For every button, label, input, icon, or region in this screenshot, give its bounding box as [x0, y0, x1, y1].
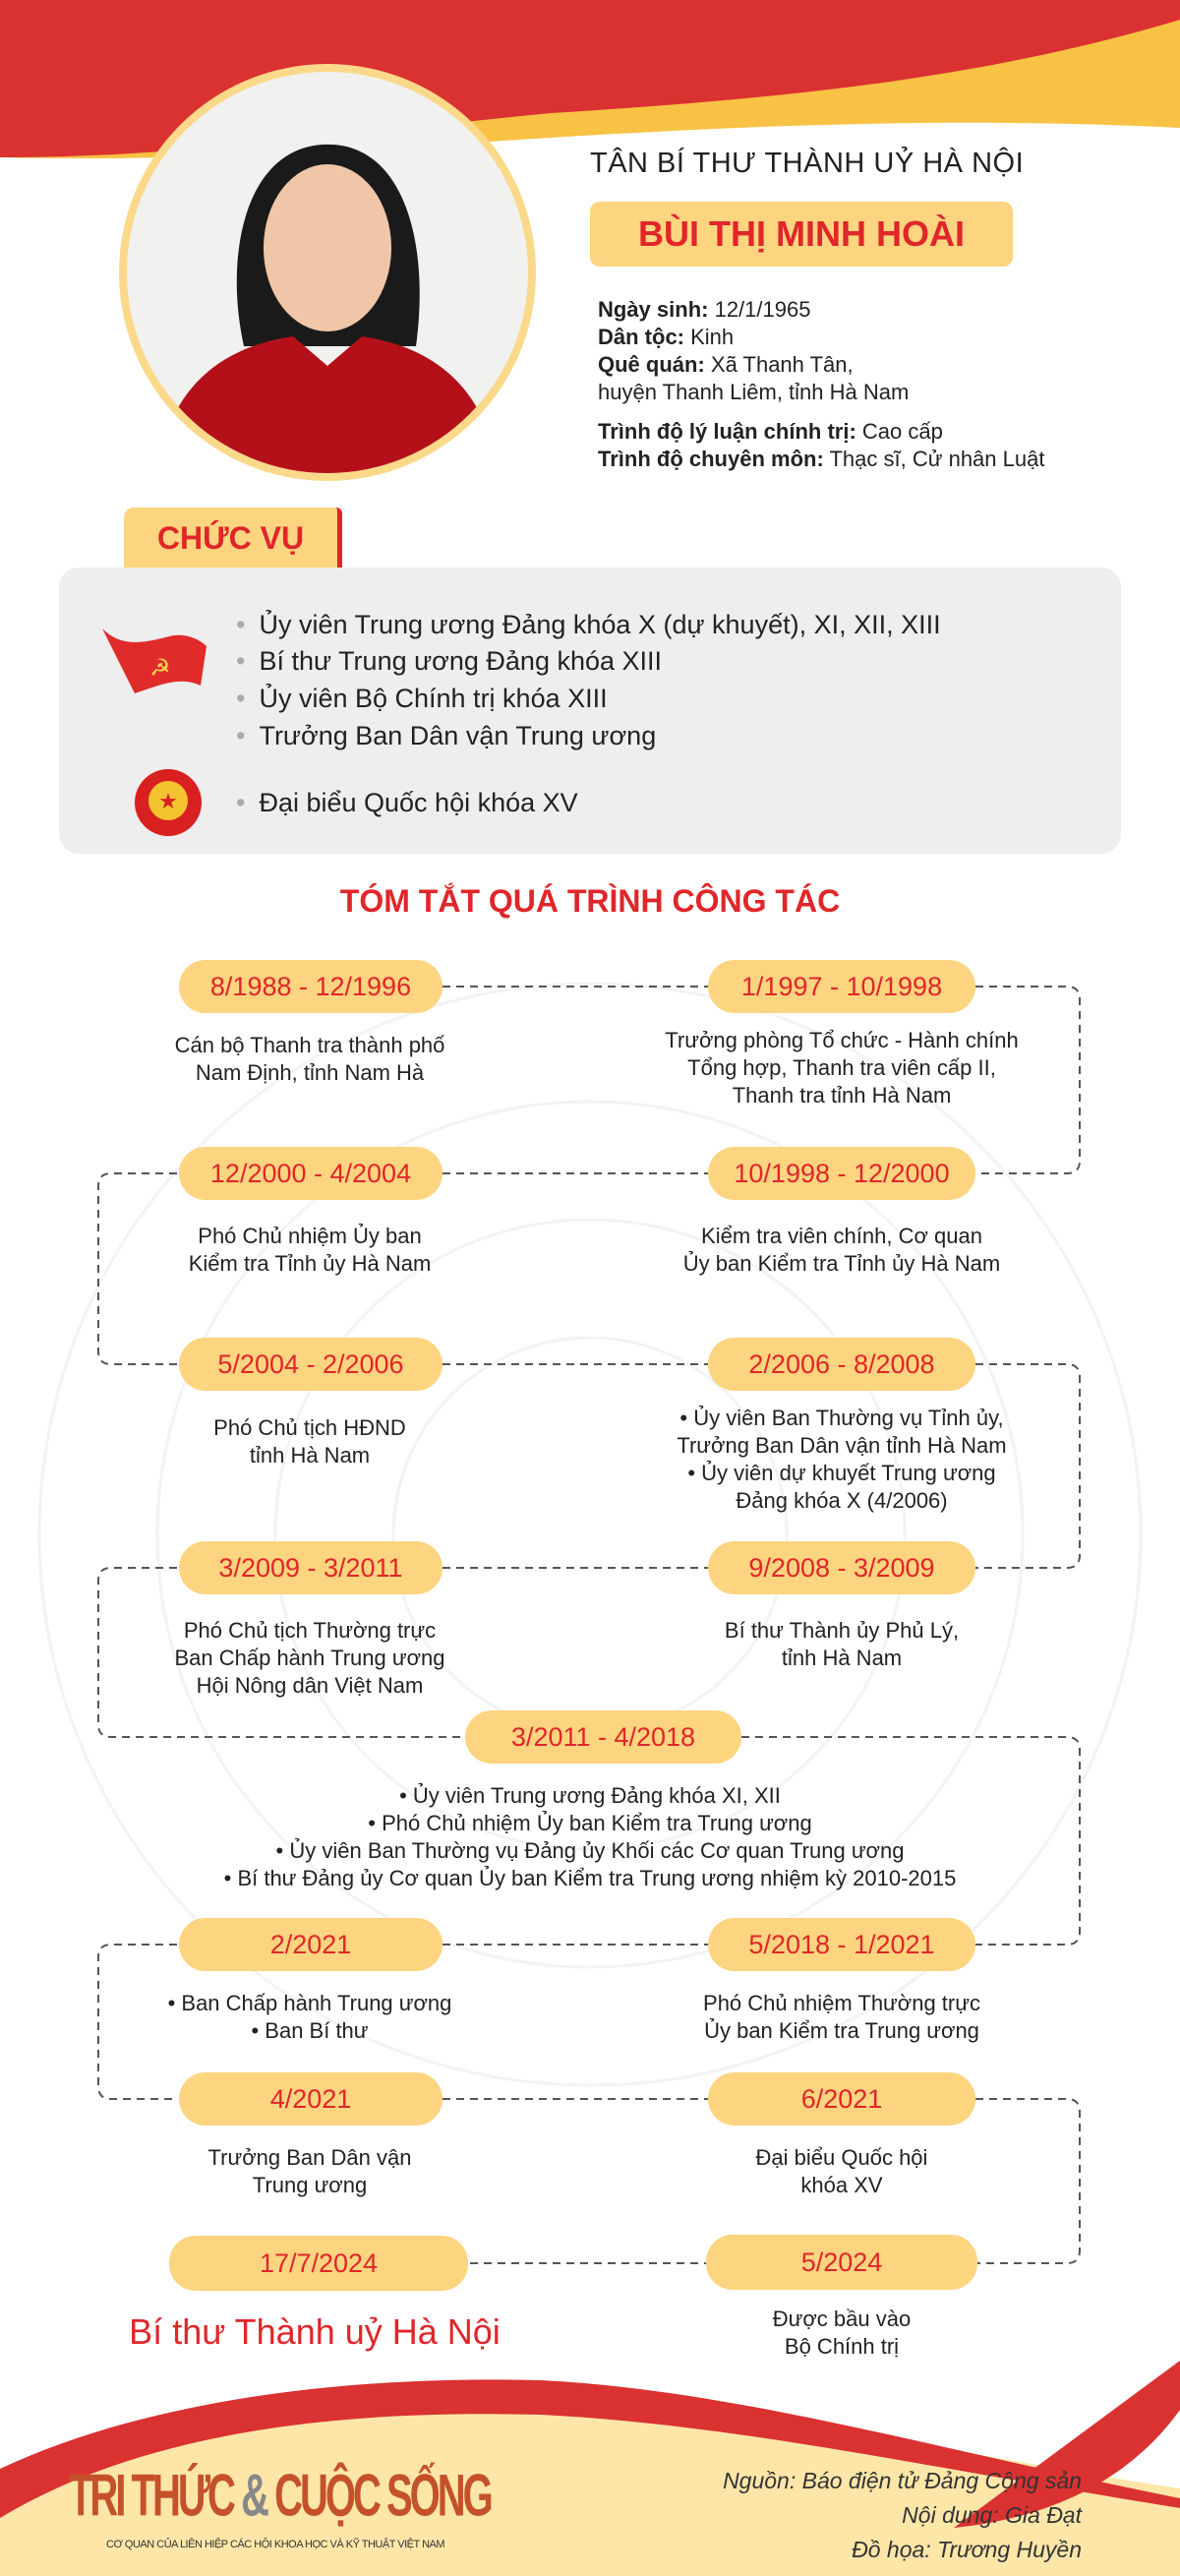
header title: TÂN BÍ THƯ THÀNH UỶ HÀ NỘI	[590, 148, 1024, 179]
bullet list: Ủy viên Bộ Chính trị khóa XIII	[259, 684, 608, 713]
text: khóa XV	[800, 2173, 883, 2197]
row 8	[169, 2236, 468, 2291]
text: Ủy ban Kiểm tra Trung ương	[704, 2018, 979, 2043]
text: Phó Chủ tịch HĐND	[213, 1415, 406, 1440]
text: Bí thư Thành uỷ Hà Nội	[129, 2311, 501, 2352]
row 7	[179, 2072, 442, 2126]
row 3	[179, 1338, 442, 1391]
chuc vu tab	[124, 508, 342, 569]
text: • Ban Chấp hành Trung ương	[168, 1991, 451, 2015]
text: Thanh tra tỉnh Hà Nam	[733, 1083, 951, 1108]
text: 5/2018 - 1/2021	[748, 1930, 935, 1959]
text: • Ủy viên Ban Thường vụ Tỉnh ủy,	[679, 1406, 1004, 1430]
text: Trưởng phòng Tổ chức - Hành chính	[665, 1028, 1019, 1052]
text: tỉnh Hà Nam	[782, 1646, 902, 1670]
row 5: 3/2011 - 4/2018	[511, 1721, 695, 1751]
text: Kiểm tra Tỉnh ủy Hà Nam	[189, 1251, 431, 1276]
personal info: Trình độ chuyên môn: Thạc sĩ, Cử nhân Luật	[598, 447, 1044, 471]
row 6	[179, 1918, 442, 1971]
text: • Ban Bí thư	[251, 2018, 369, 2043]
text: Đảng khóa X (4/2006)	[736, 1488, 948, 1513]
row 4: 3/2009 - 3/2011	[218, 1552, 403, 1582]
bullet list: Bí thư Trung ương Đảng khóa XIII	[259, 646, 662, 676]
row 1: 8/1988 - 12/1996	[210, 972, 411, 1001]
text: Cán bộ Thanh tra thành phố	[175, 1033, 444, 1057]
bullet list: Đại biểu Quốc hội khóa XV	[259, 788, 578, 817]
row 1	[179, 960, 442, 1013]
header wave	[0, 0, 1180, 158]
text: Được bầu vào	[773, 2306, 911, 2331]
panel: positions	[59, 568, 1121, 854]
text: Kiểm tra viên chính, Cơ quan	[701, 1224, 982, 1248]
text: Tổng hợp, Thanh tra viên cấp II,	[687, 1055, 996, 1080]
bullet list	[237, 610, 941, 817]
icon: national emblem: ★	[159, 792, 177, 811]
text: • Bí thư Đảng ủy Cơ quan Ủy ban Kiểm tra Trung ương nhiệm kỳ 2010-2015	[224, 1866, 956, 1890]
text: • Phó Chủ nhiệm Ủy ban Kiểm tra Trung ương	[368, 1811, 812, 1835]
row 2	[179, 1147, 442, 1200]
logo: CƠ QUAN CỦA LIÊN HIỆP CÁC HỘI KHOA HỌC VÀ KỸ THUẬT VIỆT NAM	[106, 2539, 444, 2550]
credits: Nguồn: Báo điện tử Đảng Cộng sản	[723, 2468, 1082, 2493]
row 8: 17/7/2024	[260, 2248, 378, 2278]
chuc vu tab: CHỨC VỤ	[157, 519, 304, 555]
row 3: 5/2004 - 2/2006	[217, 1349, 404, 1379]
personal info: Quê quán: Xã Thanh Tân,	[598, 352, 854, 377]
name box: BÙI THỊ MINH HOÀI	[638, 213, 965, 254]
credits: Đồ họa: Trương Huyền	[852, 2537, 1082, 2562]
credits	[723, 2468, 1083, 2562]
text: Đại biểu Quốc hội	[756, 2145, 927, 2170]
bullet list: Trưởng Ban Dân vận Trung ương	[259, 721, 656, 750]
text: Phó Chủ nhiệm Thường trực	[703, 1991, 980, 2015]
personal info	[598, 297, 1044, 471]
row 2: 12/2000 - 4/2004	[210, 1159, 411, 1188]
text: Bộ Chính trị	[785, 2334, 899, 2359]
text: Trung ương	[253, 2173, 367, 2197]
row 4	[179, 1541, 442, 1594]
row 6: 2/2021	[270, 1930, 351, 1959]
text: 2/2006 - 8/2008	[748, 1349, 935, 1379]
text: • Ủy viên dự khuyết Trung ương	[687, 1461, 996, 1485]
text: Trưởng Ban Dân vận tỉnh Hà Nam	[677, 1433, 1007, 1458]
text: Phó Chủ tịch Thường trực	[184, 1618, 436, 1643]
personal info: huyện Thanh Liêm, tỉnh Hà Nam	[598, 380, 909, 404]
text: 6/2021	[801, 2083, 882, 2113]
text: Phó Chủ nhiệm Ủy ban	[198, 1224, 422, 1248]
row 7: 4/2021	[270, 2083, 351, 2113]
text: Nam Định, tỉnh Nam Hà	[196, 1060, 424, 1085]
logo: TRI THỨC & CUỘC SỐNG	[69, 2464, 491, 2529]
text: 10/1998 - 12/2000	[734, 1159, 950, 1188]
text: Bí thư Thành ủy Phủ Lý,	[725, 1618, 959, 1643]
text: 5/2024	[801, 2247, 882, 2276]
name box	[590, 202, 1013, 267]
personal info: Dân tộc: Kinh	[598, 325, 734, 349]
icon: party flag	[102, 629, 206, 693]
row 5	[465, 1710, 741, 1764]
text: Trưởng Ban Dân vận	[208, 2145, 411, 2170]
icon: national emblem	[135, 769, 202, 836]
credits: Nội dung: Gia Đạt	[902, 2502, 1082, 2528]
icon: party flag: ☭	[149, 655, 171, 682]
text: Ban Chấp hành Trung ương	[174, 1646, 444, 1670]
text: Ủy ban Kiểm tra Tỉnh ủy Hà Nam	[683, 1251, 1000, 1276]
personal info: Ngày sinh: 12/1/1965	[598, 297, 810, 322]
text: Hội Nông dân Việt Nam	[197, 1673, 423, 1698]
text: • Ủy viên Trung ương Đảng khóa XI, XII	[399, 1783, 781, 1808]
footer wave	[0, 2361, 1180, 2576]
personal info: Trình độ lý luận chính trị: Cao cấp	[598, 419, 943, 444]
photo portrait	[119, 64, 536, 481]
text: • Ủy viên Ban Thường vụ Đảng ủy Khối các Cơ quan Trung ương	[276, 1838, 904, 1863]
text: 9/2008 - 3/2009	[748, 1552, 935, 1582]
text: tỉnh Hà Nam	[250, 1443, 370, 1468]
timeline heading: TÓM TẮT QUÁ TRÌNH CÔNG TÁC	[340, 883, 840, 919]
text: 1/1997 - 10/1998	[741, 972, 942, 1001]
bullet list: Ủy viên Trung ương Đảng khóa X (dự khuyết), XI, XII, XIII	[259, 610, 941, 639]
